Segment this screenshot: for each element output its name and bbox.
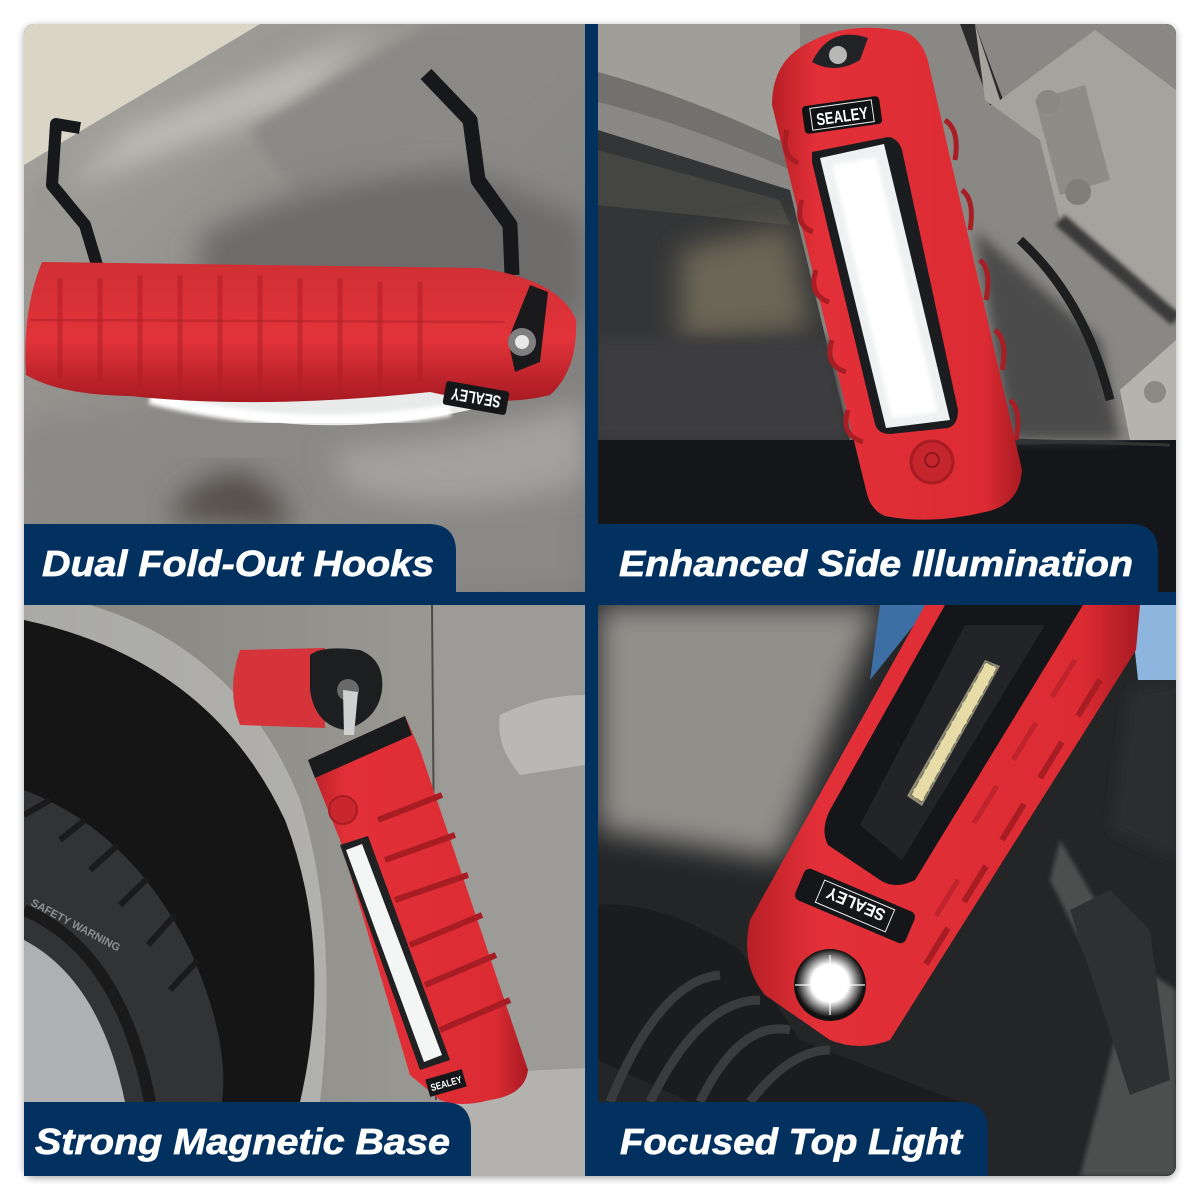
icon: left black fold-out hook xyxy=(52,124,97,265)
panel: strong magnetic base photo xyxy=(24,605,585,1176)
work light body angled xyxy=(747,605,1140,1046)
logo badge: SEALEY xyxy=(815,103,870,130)
caption: strong magnetic base: Strong Magnetic Base xyxy=(35,1121,450,1162)
joint xyxy=(343,690,358,735)
caption: focused top light: Focused Top Light xyxy=(620,1121,964,1162)
icon: right black fold-out hook xyxy=(426,74,512,275)
logo badge xyxy=(442,381,510,415)
body of rotating light xyxy=(308,716,528,1104)
caption: enhanced side illumination: Enhanced Side Illumination xyxy=(619,543,1133,584)
logo badge: SEALEY xyxy=(430,1075,464,1094)
tyre sidewall text: SAFETY WARNING xyxy=(29,897,122,954)
hinge xyxy=(508,285,548,372)
top hinge xyxy=(812,35,868,68)
caption: focused top light xyxy=(586,1102,988,1176)
blue glove xyxy=(1135,605,1176,680)
work light body with side panel xyxy=(772,28,1022,520)
engine bay grey panels and cables xyxy=(960,24,1005,105)
LED strip xyxy=(907,660,1000,806)
top torch lens xyxy=(794,949,866,1021)
panel: enhanced side illumination photo xyxy=(598,24,1176,592)
caption: enhanced side illumination xyxy=(586,524,1158,592)
logo badge xyxy=(793,867,917,945)
caption: strong magnetic base xyxy=(24,1102,471,1176)
logo badge: SEALEY xyxy=(823,883,888,925)
logo badge xyxy=(801,96,883,134)
caption: dual fold-out hooks xyxy=(24,524,456,592)
magnetic head xyxy=(233,648,325,728)
LED panel xyxy=(812,137,958,434)
panel: focused top light photo xyxy=(598,605,1176,1176)
tyre xyxy=(24,790,223,1102)
logo badge: SEALEY xyxy=(449,384,502,411)
panel: dual fold-out hooks photo xyxy=(24,24,585,592)
work light body horizontal xyxy=(25,262,576,425)
icon: power button xyxy=(911,441,953,483)
caption: dual fold-out hooks: Dual Fold-Out Hooks xyxy=(42,543,434,584)
wheel arch xyxy=(24,620,314,1102)
LED strip xyxy=(340,836,450,1070)
logo badge xyxy=(425,1069,467,1097)
